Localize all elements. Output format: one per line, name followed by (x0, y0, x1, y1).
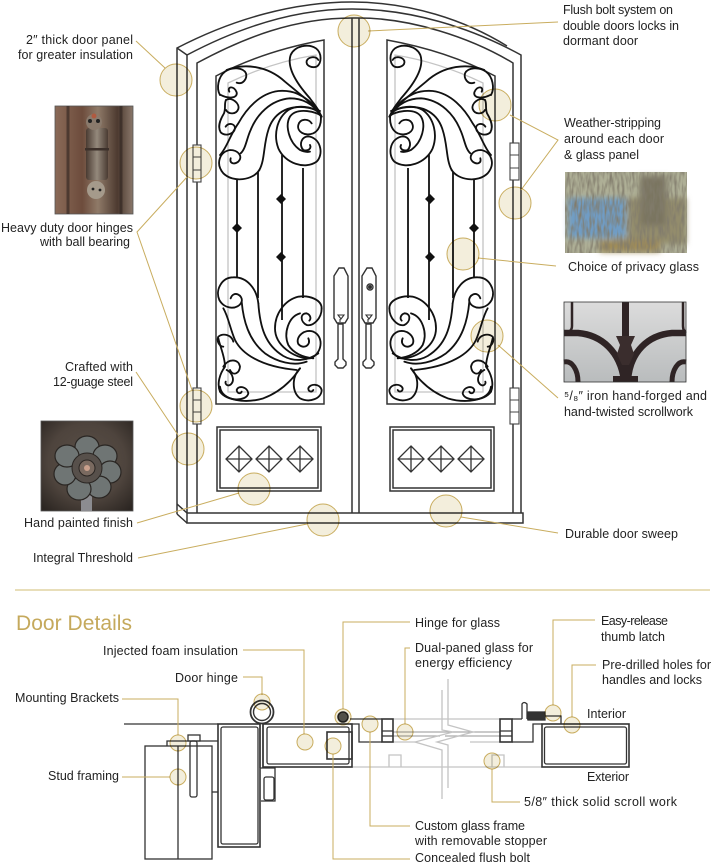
door hinge (250, 700, 274, 768)
label: dual pane: Dual-paned glass for (415, 641, 533, 655)
label: flush bolt detail: Concealed flush bolt (415, 851, 531, 865)
label: glass frame: with removable stopper (414, 834, 547, 848)
label: scroll work: 5/8″ thick solid scroll work (524, 795, 678, 809)
label: glass frame (414, 819, 547, 848)
highlight circles: details (170, 694, 580, 785)
label: dual pane (415, 641, 533, 670)
label: steel: 12-guage steel (53, 375, 133, 389)
mounting bracket and bolt (124, 724, 218, 797)
thumb latch (522, 702, 561, 724)
labels: left callouts (1, 33, 133, 530)
glass hinge (338, 712, 348, 722)
label: holes (602, 658, 711, 687)
right door glass panel (387, 40, 495, 404)
section diagram (124, 679, 629, 859)
label: hinges: with ball bearing (39, 235, 130, 249)
scrollwork top (218, 46, 322, 179)
label: glass frame: Custom glass frame (415, 819, 525, 833)
label: weather-stripping: & glass panel (564, 148, 639, 162)
door handles (334, 268, 376, 368)
label: stud: Stud framing (48, 769, 119, 783)
label: iron (564, 389, 707, 419)
photo: privacy glass (565, 172, 687, 253)
label: thumb latch (601, 614, 668, 644)
labels: right callouts (563, 3, 707, 541)
lower raised panels with diamonds (217, 427, 494, 491)
glass frame (350, 719, 542, 742)
jamb (218, 724, 260, 847)
label: iron: ⁵/₈″ iron hand-forged and (564, 389, 707, 403)
door hinges (193, 143, 519, 424)
label: flush bolt: dormant door (563, 34, 638, 48)
photo: hinge (55, 106, 133, 214)
left door glass panel (216, 40, 324, 404)
leader lines: door (136, 22, 558, 558)
label: weather-stripping: Weather-stripping (564, 116, 661, 130)
label: iron: hand-twisted scrollwork (564, 405, 694, 419)
label: steel: Crafted with (65, 360, 133, 374)
label: flush bolt: double doors locks in (563, 19, 679, 33)
photo: rosette (41, 421, 133, 511)
label: door panel: for greater insulation (18, 48, 133, 62)
labels: details (15, 614, 711, 865)
label: glass hinge: Hinge for glass (415, 616, 500, 630)
label: sweep: Durable door sweep (565, 527, 678, 541)
label: interior: Interior (587, 707, 626, 721)
label: door panel: 2″ thick door panel (26, 33, 133, 47)
label: flush bolt (563, 3, 679, 48)
label: privacy glass: Choice of privacy glass (568, 260, 699, 274)
door frame (177, 2, 523, 523)
label: dual pane: energy efficiency (415, 656, 513, 670)
label: holes: handles and locks (602, 673, 702, 687)
label: exterior: Exterior (587, 770, 629, 784)
label: threshold: Integral Threshold (33, 551, 133, 565)
label: hinges (1, 221, 133, 249)
label: weather-stripping: around each door (564, 132, 664, 146)
label: foam: Injected foam insulation (103, 644, 238, 658)
photo: iron scrollwork (564, 302, 686, 382)
highlight circles: door (160, 15, 531, 536)
glass and scroll (light) (352, 679, 542, 799)
door edge section (260, 724, 352, 801)
label: flush bolt: Flush bolt system on (563, 3, 673, 17)
label: brackets: Mounting Brackets (15, 691, 119, 705)
heading: Door Details: Door Details (16, 612, 132, 635)
label: steel (53, 360, 133, 389)
leader lines: details (122, 620, 596, 859)
label: hinges: Heavy duty door hinges (1, 221, 133, 235)
label: thumb latch: Easy-release (601, 614, 668, 628)
label: finish: Hand painted finish (24, 516, 133, 530)
label: weather-stripping (564, 116, 664, 162)
scrollwork bottom (218, 277, 322, 401)
door drawing (177, 2, 523, 523)
label: thumb latch: thumb latch (601, 630, 665, 644)
right door section (542, 724, 629, 767)
stud framing (145, 746, 212, 859)
label: door hinge: Door hinge (175, 671, 238, 685)
label: door panel (18, 33, 133, 62)
label: holes: Pre-drilled holes for (602, 658, 711, 672)
iron bars (237, 155, 303, 320)
